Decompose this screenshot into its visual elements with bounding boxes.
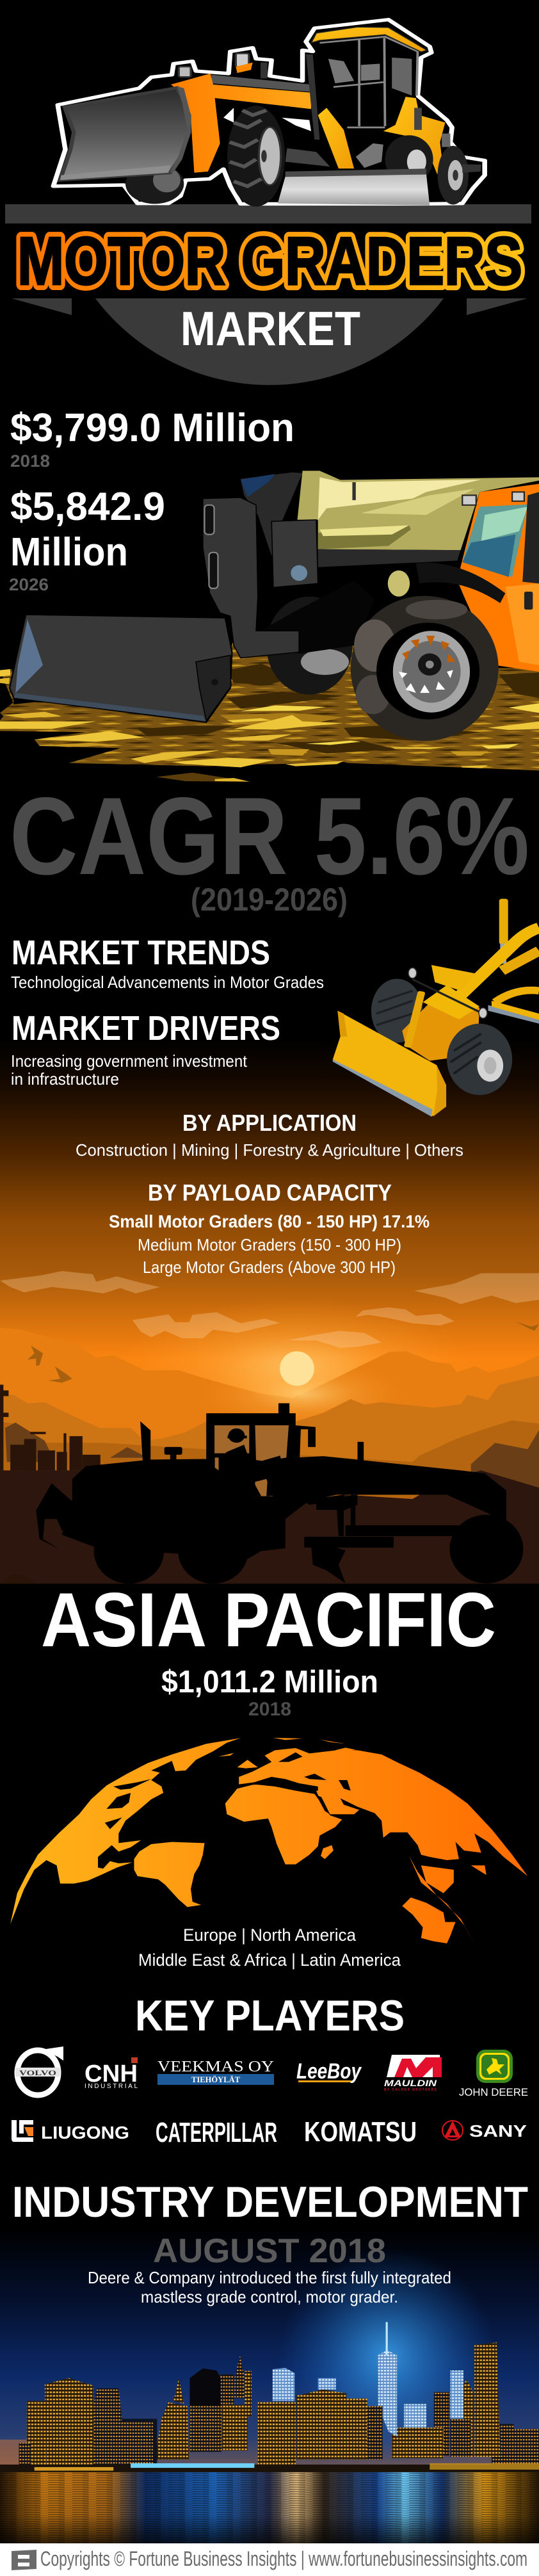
- stat: 2026 value: [9, 485, 165, 594]
- hood: [298, 471, 539, 550]
- by application: BY APPLICATION: [182, 1110, 357, 1136]
- by payload capacity: Large Motor Graders (Above 300 HP): [143, 1258, 396, 1277]
- water: [0, 2472, 539, 2543]
- cab windows: [214, 1425, 289, 1496]
- by application: Construction | Mining | Forestry & Agriculture | Others: [76, 1140, 463, 1160]
- logo: Veekmas Oy: VEEKMAS OY: [157, 2059, 274, 2075]
- Eurasia: [239, 1748, 527, 1876]
- region year: 2018: [248, 1699, 291, 1720]
- development date: AUGUST 2018: [153, 2232, 386, 2270]
- logo: Mauldin: [384, 2055, 442, 2092]
- fender: [416, 563, 505, 603]
- logo: Volvo: VOLVO: [19, 2068, 56, 2077]
- cab: [457, 484, 539, 672]
- stat: 2026 value: Million: [10, 530, 128, 574]
- illustration: orange motor grader: [53, 20, 485, 207]
- British Isles and Arctic islands: [218, 1738, 356, 1769]
- other regions: Europe | North America: [183, 1925, 357, 1945]
- logo: LeeBoy: LeeBoy: [296, 2059, 362, 2084]
- near mountains: [0, 1420, 539, 1584]
- stat: 2018 value: $3,799.0 Million: [10, 406, 294, 450]
- Madagascar: [321, 1845, 334, 1859]
- market drivers: [11, 1009, 280, 1089]
- illustration: yellow grader: [333, 899, 539, 1117]
- waterfront: [0, 2465, 539, 2474]
- dark peaks: [5, 1423, 539, 1584]
- market drivers: Increasing government investment: [11, 1051, 248, 1071]
- region: Asia Pacific: ASIA PACIFIC: [41, 1577, 496, 1663]
- glow: [278, 2248, 496, 2465]
- logo: Mauldin: BY CALDER BROTHERS: [384, 2088, 437, 2092]
- mid mountains: [0, 1375, 539, 1584]
- operator silhouette: [219, 1429, 284, 1496]
- market drivers: MARKET DRIVERS: [12, 1009, 280, 1048]
- rear wheel: [266, 597, 352, 695]
- logo: Caterpillar: CATERPILLAR: [156, 2117, 277, 2148]
- footer: [0, 2543, 539, 2576]
- logo: Mauldin: MAULDIN: [384, 2078, 437, 2088]
- sun: [280, 1351, 314, 1386]
- stat: 2018 value: [10, 406, 294, 471]
- Australia: [402, 1897, 456, 1943]
- golden ground: [0, 640, 539, 782]
- far mountains: [0, 1327, 539, 1584]
- by payload capacity: BY PAYLOAD CAPACITY: [148, 1179, 392, 1206]
- sun glow: [117, 1298, 474, 1439]
- bird: [516, 1322, 539, 1331]
- market drivers: in infrastructure: [11, 1069, 119, 1089]
- stat: 2026 value: 2026: [9, 575, 49, 594]
- region value: $1,011.2 Million: [161, 1665, 378, 1699]
- Africa: [225, 1785, 342, 1865]
- market trends: MARKET TRENDS: [12, 934, 270, 972]
- stat: 2018 value: 2018: [10, 451, 50, 471]
- other regions: [138, 1925, 401, 1970]
- ground: [0, 1470, 539, 1584]
- sunset backdrop: [0, 1271, 539, 1584]
- development description: [88, 2268, 451, 2306]
- banner semicircle: [95, 298, 444, 385]
- stat: 2026 value: $5,842.9: [10, 485, 165, 529]
- seas and lakes: [105, 1753, 426, 1865]
- bird: [28, 1346, 43, 1366]
- other regions: Middle East & Africa | Latin America: [138, 1950, 401, 1970]
- by payload capacity: [109, 1179, 430, 1277]
- grey bar: [5, 204, 531, 223]
- by application: [76, 1110, 463, 1160]
- logo: John Deere: JOHN DEERE: [459, 2086, 528, 2098]
- buildings: [19, 2322, 539, 2472]
- logo: Komatsu: KOMATSU: [304, 2116, 417, 2148]
- logo: CNH Industrial: INDUSTRIAL: [84, 2083, 138, 2090]
- bird: [48, 1366, 72, 1382]
- grader silhouette: [36, 1404, 523, 1584]
- logo: Sany: SANY: [469, 2121, 527, 2141]
- city skyline background: [0, 2228, 539, 2543]
- logo: CNH Industrial: CNH: [84, 2061, 138, 2087]
- CAGR period: (2019-2026): [191, 882, 348, 918]
- North America: [10, 1738, 241, 1924]
- sunset foreground: [0, 1384, 539, 1584]
- Southeast Asia islands: [409, 1856, 487, 1947]
- logo: LiuGong: [12, 2120, 129, 2143]
- logo: John Deere: [459, 2050, 528, 2098]
- main wheel: [351, 596, 499, 741]
- subtitle: Market: MARKET: [181, 302, 360, 355]
- development description: mastless grade control, motor grader.: [141, 2287, 398, 2306]
- logo: LiuGong: LIUGONG: [41, 2123, 129, 2143]
- by payload capacity: Medium Motor Graders (150 - 300 HP): [138, 1235, 401, 1254]
- by payload capacity: Small Motor Graders (80 - 150 HP) 17.1%: [109, 1211, 430, 1231]
- logo: Veekmas Oy: TIEHÖYLÄT: [191, 2075, 240, 2084]
- sunset sky: [0, 1037, 539, 1584]
- front blade: [10, 615, 232, 722]
- heading: key players: KEY PLAYERS: [135, 1991, 405, 2040]
- South America: [134, 1842, 205, 1907]
- right banner tail: [467, 298, 527, 315]
- globe: [10, 1738, 527, 1947]
- clouds: [0, 1271, 539, 1348]
- refinery silhouette: [0, 1384, 101, 1584]
- market trends: Technological Advancements in Motor Grades: [11, 973, 324, 992]
- illustration: grader on golden ground: [10, 471, 539, 741]
- development description: Deere & Company introduced the first fully integrated: [88, 2268, 451, 2287]
- logo: Volvo: [15, 2046, 63, 2095]
- logo: Sany: [442, 2121, 527, 2141]
- night sky: [0, 2228, 539, 2475]
- market trends: [11, 934, 324, 992]
- chassis: [258, 580, 374, 654]
- logo: Veekmas Oy: [157, 2059, 274, 2085]
- left banner tail: [12, 298, 72, 315]
- header banner: [5, 204, 531, 385]
- orange horizon glow: [0, 2440, 38, 2472]
- footer logo: [12, 2550, 36, 2570]
